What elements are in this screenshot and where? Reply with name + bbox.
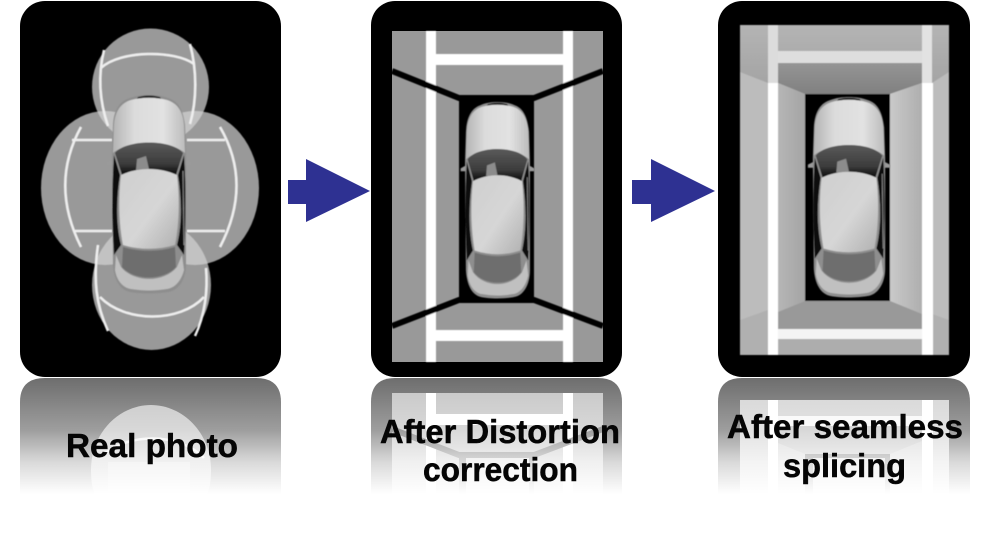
label: after distortion correction	[380, 413, 620, 488]
panel: after seamless splicing	[718, 1, 970, 377]
reflection of the panels	[0, 378, 1000, 496]
label: after distortion correction: After Distortion	[380, 413, 620, 450]
label: after seamless splicing: After seamless	[727, 408, 963, 445]
label: real photo: Real photo	[66, 427, 238, 464]
car: real photo	[107, 95, 191, 294]
panel: real photo	[20, 1, 281, 377]
label: after seamless splicing: splicing	[783, 447, 906, 484]
arrow: real photo to distortion correction	[288, 159, 370, 222]
car: after seamless splicing	[808, 97, 890, 297]
car: after distortion correction	[461, 102, 534, 299]
label: after distortion correction: correction	[423, 451, 578, 488]
panel: after distortion correction	[371, 1, 622, 377]
arrow: distortion correction to seamless splicing	[632, 159, 715, 222]
label: after seamless splicing	[727, 408, 963, 484]
